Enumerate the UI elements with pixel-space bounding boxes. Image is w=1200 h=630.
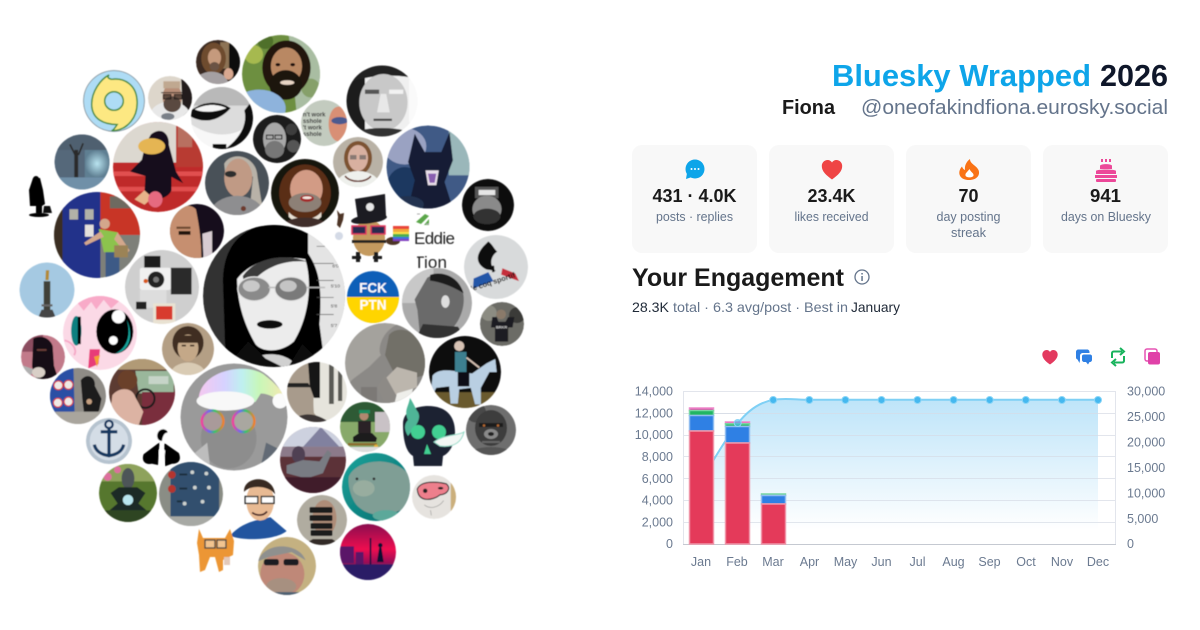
avatar: le coq sportif logo: le coq sportif xyxy=(470,270,517,293)
avatar: close-up eye xyxy=(170,204,224,258)
heading: your engagement: Your Engagement xyxy=(632,264,845,292)
month labels: Nov xyxy=(1051,555,1074,569)
profile handle: @oneofakindfiona.eurosky.social xyxy=(861,97,1168,119)
chart gridlines over area xyxy=(701,414,1098,522)
avatar: le coq sportif logo xyxy=(464,235,528,299)
panel: day posting streak: 70 xyxy=(958,185,978,206)
avatar: FCK PTN badge: FCK xyxy=(359,280,387,295)
cumulative points xyxy=(734,396,1102,426)
avatar: cartoon man in blue shirt xyxy=(230,479,287,539)
left axis labels: 12,000 xyxy=(635,406,673,420)
month labels: Jan xyxy=(691,555,711,569)
right axis labels xyxy=(1127,384,1165,551)
engagement summary: total · 6.3 avg/post · Best in xyxy=(673,299,848,315)
avatar: anchor button xyxy=(86,418,132,464)
avatar: man with cap and sunglasses xyxy=(258,537,316,596)
month labels: Oct xyxy=(1016,555,1036,569)
panel: likes received: likes received xyxy=(794,209,868,224)
profile name: Fiona xyxy=(782,96,836,119)
panel: likes received xyxy=(769,145,894,253)
month labels: Mar xyxy=(762,555,784,569)
avatar cluster xyxy=(20,33,528,596)
avatar: bearded man among leaves xyxy=(241,34,321,114)
chart: monthly engagement xyxy=(635,384,1165,569)
panel: posts and replies: posts · replies xyxy=(656,209,733,224)
left axis labels: 10,000 xyxy=(635,428,673,442)
avatar: person in black jersey xyxy=(480,302,525,346)
avatar: woman driving xyxy=(109,359,175,425)
month labels: Aug xyxy=(942,555,965,569)
legend: heart xyxy=(1042,350,1058,364)
avatar: gorilla xyxy=(465,404,517,456)
avatar: red and purple noir scene xyxy=(340,524,396,580)
avatar: FCK PTN badge xyxy=(347,271,399,323)
avatar: potato character with top hat and rainbow flag xyxy=(335,194,409,262)
right axis labels: 5,000 xyxy=(1127,512,1158,526)
avatar: person in black jersey: BRKR xyxy=(496,324,507,329)
left axis labels: 14,000 xyxy=(635,384,673,398)
avatar: woman with sign: 't work xyxy=(303,125,323,131)
month labels: Dec xyxy=(1087,555,1109,569)
avatar: sun-lit man in red shadows xyxy=(280,427,346,493)
icon: info xyxy=(855,270,869,284)
avatar: woman with sign: n't work xyxy=(303,113,326,119)
cumulative area xyxy=(701,399,1098,544)
cumulative line xyxy=(701,399,1098,481)
avatar: half face black and white xyxy=(287,362,347,422)
avatar: grey man looking down xyxy=(345,323,425,403)
panel: days on Bluesky: 941 xyxy=(1090,185,1121,206)
avatar: man with curly hair xyxy=(253,115,301,163)
bars: March xyxy=(762,494,786,544)
bars: January xyxy=(690,408,714,544)
avatar: orange fox with mug xyxy=(197,529,234,572)
avatar: instant camera xyxy=(125,250,199,325)
title: 2026 xyxy=(1100,58,1168,93)
left axis labels: 0 xyxy=(666,537,673,551)
icon: speech bubble xyxy=(686,160,704,179)
avatar: man by blue police box xyxy=(54,192,140,278)
engagement summary: 28.3K xyxy=(632,299,670,315)
avatar: skull with green flames xyxy=(403,398,464,466)
engagement summary: January xyxy=(851,299,900,315)
right axis labels: 10,000 xyxy=(1127,486,1165,500)
avatar: rider on white horse xyxy=(429,336,501,410)
engagement summary xyxy=(632,299,900,315)
avatar: Santa hat and rainbow glasses xyxy=(180,364,288,470)
avatar: Berlin victory column xyxy=(20,262,74,318)
panel: day posting streak: day posting xyxy=(936,209,1000,224)
panel: day posting streak: streak xyxy=(951,225,986,240)
avatar: woman in sunglasses mugshot: 5'7 xyxy=(331,323,338,329)
avatar: bald man profile black and white xyxy=(402,268,472,338)
chart gridlines xyxy=(683,391,1116,544)
month labels: Apr xyxy=(800,555,819,569)
avatar: black and white masked man xyxy=(462,179,514,231)
avatar: statue in blue light xyxy=(54,134,110,191)
avatar: broken image alt text xyxy=(414,214,455,272)
avatar: man with eye patch xyxy=(204,150,270,216)
avatar: woman with sign: sshole xyxy=(303,132,322,138)
avatar: snarling wolf dog xyxy=(383,126,474,213)
avatar: woman in sunglasses mugshot xyxy=(203,225,345,367)
avatar: blue control panel xyxy=(159,462,223,526)
right axis labels: 15,000 xyxy=(1127,461,1165,475)
avatar: balaclava figure xyxy=(21,335,65,379)
avatar: black and white lips xyxy=(191,87,253,149)
left axis labels: 2,000 xyxy=(642,516,673,530)
right axis labels: 25,000 xyxy=(1127,410,1165,424)
avatar: woman in sunglasses mugshot: 5'8 xyxy=(331,303,338,309)
panel: days on Bluesky: days on Bluesky xyxy=(1061,209,1151,224)
avatar: person with pearls xyxy=(270,158,340,228)
legend: quotes xyxy=(1145,349,1160,364)
avatar: woman in sunglasses mugshot: 5'10 xyxy=(331,283,340,289)
panel: posts and replies xyxy=(632,145,757,253)
avatar: woman with glasses xyxy=(332,136,384,187)
avatar: gritty man black and white xyxy=(346,64,410,138)
icon: flame xyxy=(959,159,979,180)
avatar: FCK PTN badge: PTN xyxy=(359,297,387,312)
panel: days on Bluesky xyxy=(1043,145,1168,253)
month labels: May xyxy=(834,555,858,569)
avatar: stacked sunglasses xyxy=(297,495,347,545)
avatar: sepia teen portrait xyxy=(161,322,215,376)
left axis labels: 4,000 xyxy=(642,494,673,508)
avatar: black and white silhouette xyxy=(143,428,180,466)
avatar: woman with sign: sshole xyxy=(303,119,322,125)
title: Bluesky Wrapped xyxy=(832,58,1091,93)
right axis labels: 0 xyxy=(1127,537,1134,551)
right axis labels: 30,000 xyxy=(1127,384,1165,398)
panel: likes received: 23.4K xyxy=(808,185,856,206)
month labels: Feb xyxy=(726,555,748,569)
avatar: man with glasses xyxy=(148,76,193,120)
avatar: long-haired man xyxy=(195,39,241,85)
icon: birthday cake xyxy=(1095,159,1117,182)
avatar: manatee xyxy=(342,453,410,521)
avatar: woman with sign xyxy=(301,100,349,146)
left axis labels: 8,000 xyxy=(642,450,673,464)
left axis labels: 6,000 xyxy=(642,472,673,486)
avatar: woman in sunglasses mugshot: 6'0 xyxy=(332,264,339,270)
month labels: Jul xyxy=(910,555,925,569)
avatar: pig nose sketch xyxy=(412,475,456,519)
month labels: Sep xyxy=(978,555,1001,569)
bars: February xyxy=(726,422,750,544)
icon: heart xyxy=(822,160,842,180)
avatar: hurricane symbol xyxy=(83,70,145,132)
avatar: no-smoking signs xyxy=(50,368,106,426)
avatar: toy raven xyxy=(113,122,203,212)
right axis labels: 20,000 xyxy=(1127,436,1165,450)
month labels xyxy=(691,555,1109,569)
panel: posts and replies: 431 · 4.0K xyxy=(652,185,737,206)
month labels: Jun xyxy=(871,555,892,569)
avatar: man on skateboard xyxy=(340,402,390,452)
left axis labels xyxy=(635,384,673,551)
avatar: broken image alt text: Tion xyxy=(414,253,447,272)
legend: reposts xyxy=(1112,348,1124,366)
avatar: broken image alt text: Eddie xyxy=(414,229,455,248)
avatar: pink pony face xyxy=(63,296,137,370)
avatar: meditating figure in jungle xyxy=(99,464,157,522)
avatar: silhouette of parent and child xyxy=(29,176,52,217)
panel: day posting streak xyxy=(906,145,1031,253)
legend: replies xyxy=(1076,350,1092,364)
